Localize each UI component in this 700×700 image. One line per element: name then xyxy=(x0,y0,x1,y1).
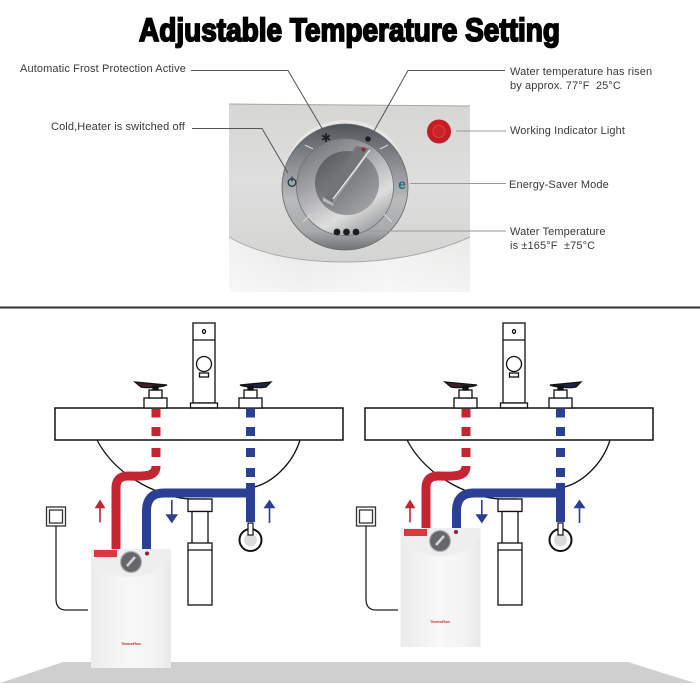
callout: temperature risen: by approx. 77°F 25°C xyxy=(510,80,621,92)
outer dial ring xyxy=(282,124,408,250)
water heater xyxy=(91,549,171,668)
hot pipe xyxy=(426,466,466,529)
callout: indicator light: Working Indicator Light xyxy=(510,125,625,137)
callout: frost protection: Automatic Frost Protection Active xyxy=(20,63,186,75)
callout: frost protection xyxy=(20,63,323,130)
callout: heater off: Cold,Heater is switched off xyxy=(51,121,186,133)
water heater xyxy=(400,528,480,647)
water heater: ThermoFlow xyxy=(430,619,451,624)
icon: frost: ✱ xyxy=(321,131,331,145)
power cable xyxy=(366,526,398,610)
callout: temperature risen xyxy=(374,66,652,131)
icon: three dots xyxy=(334,229,359,235)
icon: indicator light xyxy=(427,120,451,144)
icon: eco: e xyxy=(398,176,406,192)
water heater: ThermoFlow xyxy=(121,641,142,646)
installation diagram: right xyxy=(356,323,653,647)
callout: energy saver: Energy-Saver Mode xyxy=(509,179,609,191)
divider xyxy=(0,306,700,308)
callout: water temperature xyxy=(367,226,606,252)
callout: water temperature: is ±165°F ±75°C xyxy=(510,240,595,252)
title: Adjustable Temperature Setting xyxy=(139,12,560,48)
hot pipe xyxy=(116,466,156,550)
panel cap upper xyxy=(229,104,470,262)
callout: water temperature: Water Temperature xyxy=(510,226,606,238)
dial knob xyxy=(315,146,379,215)
callout: temperature risen: Water temperature has risen xyxy=(510,66,652,78)
power cable xyxy=(56,526,88,610)
panel body lower xyxy=(229,230,470,292)
control panel photo xyxy=(229,104,470,292)
installation diagram: left xyxy=(46,323,343,668)
floor xyxy=(0,662,695,683)
icon: power xyxy=(288,176,296,186)
icon: temperature dot xyxy=(365,136,371,142)
callout: heater off xyxy=(51,121,288,173)
